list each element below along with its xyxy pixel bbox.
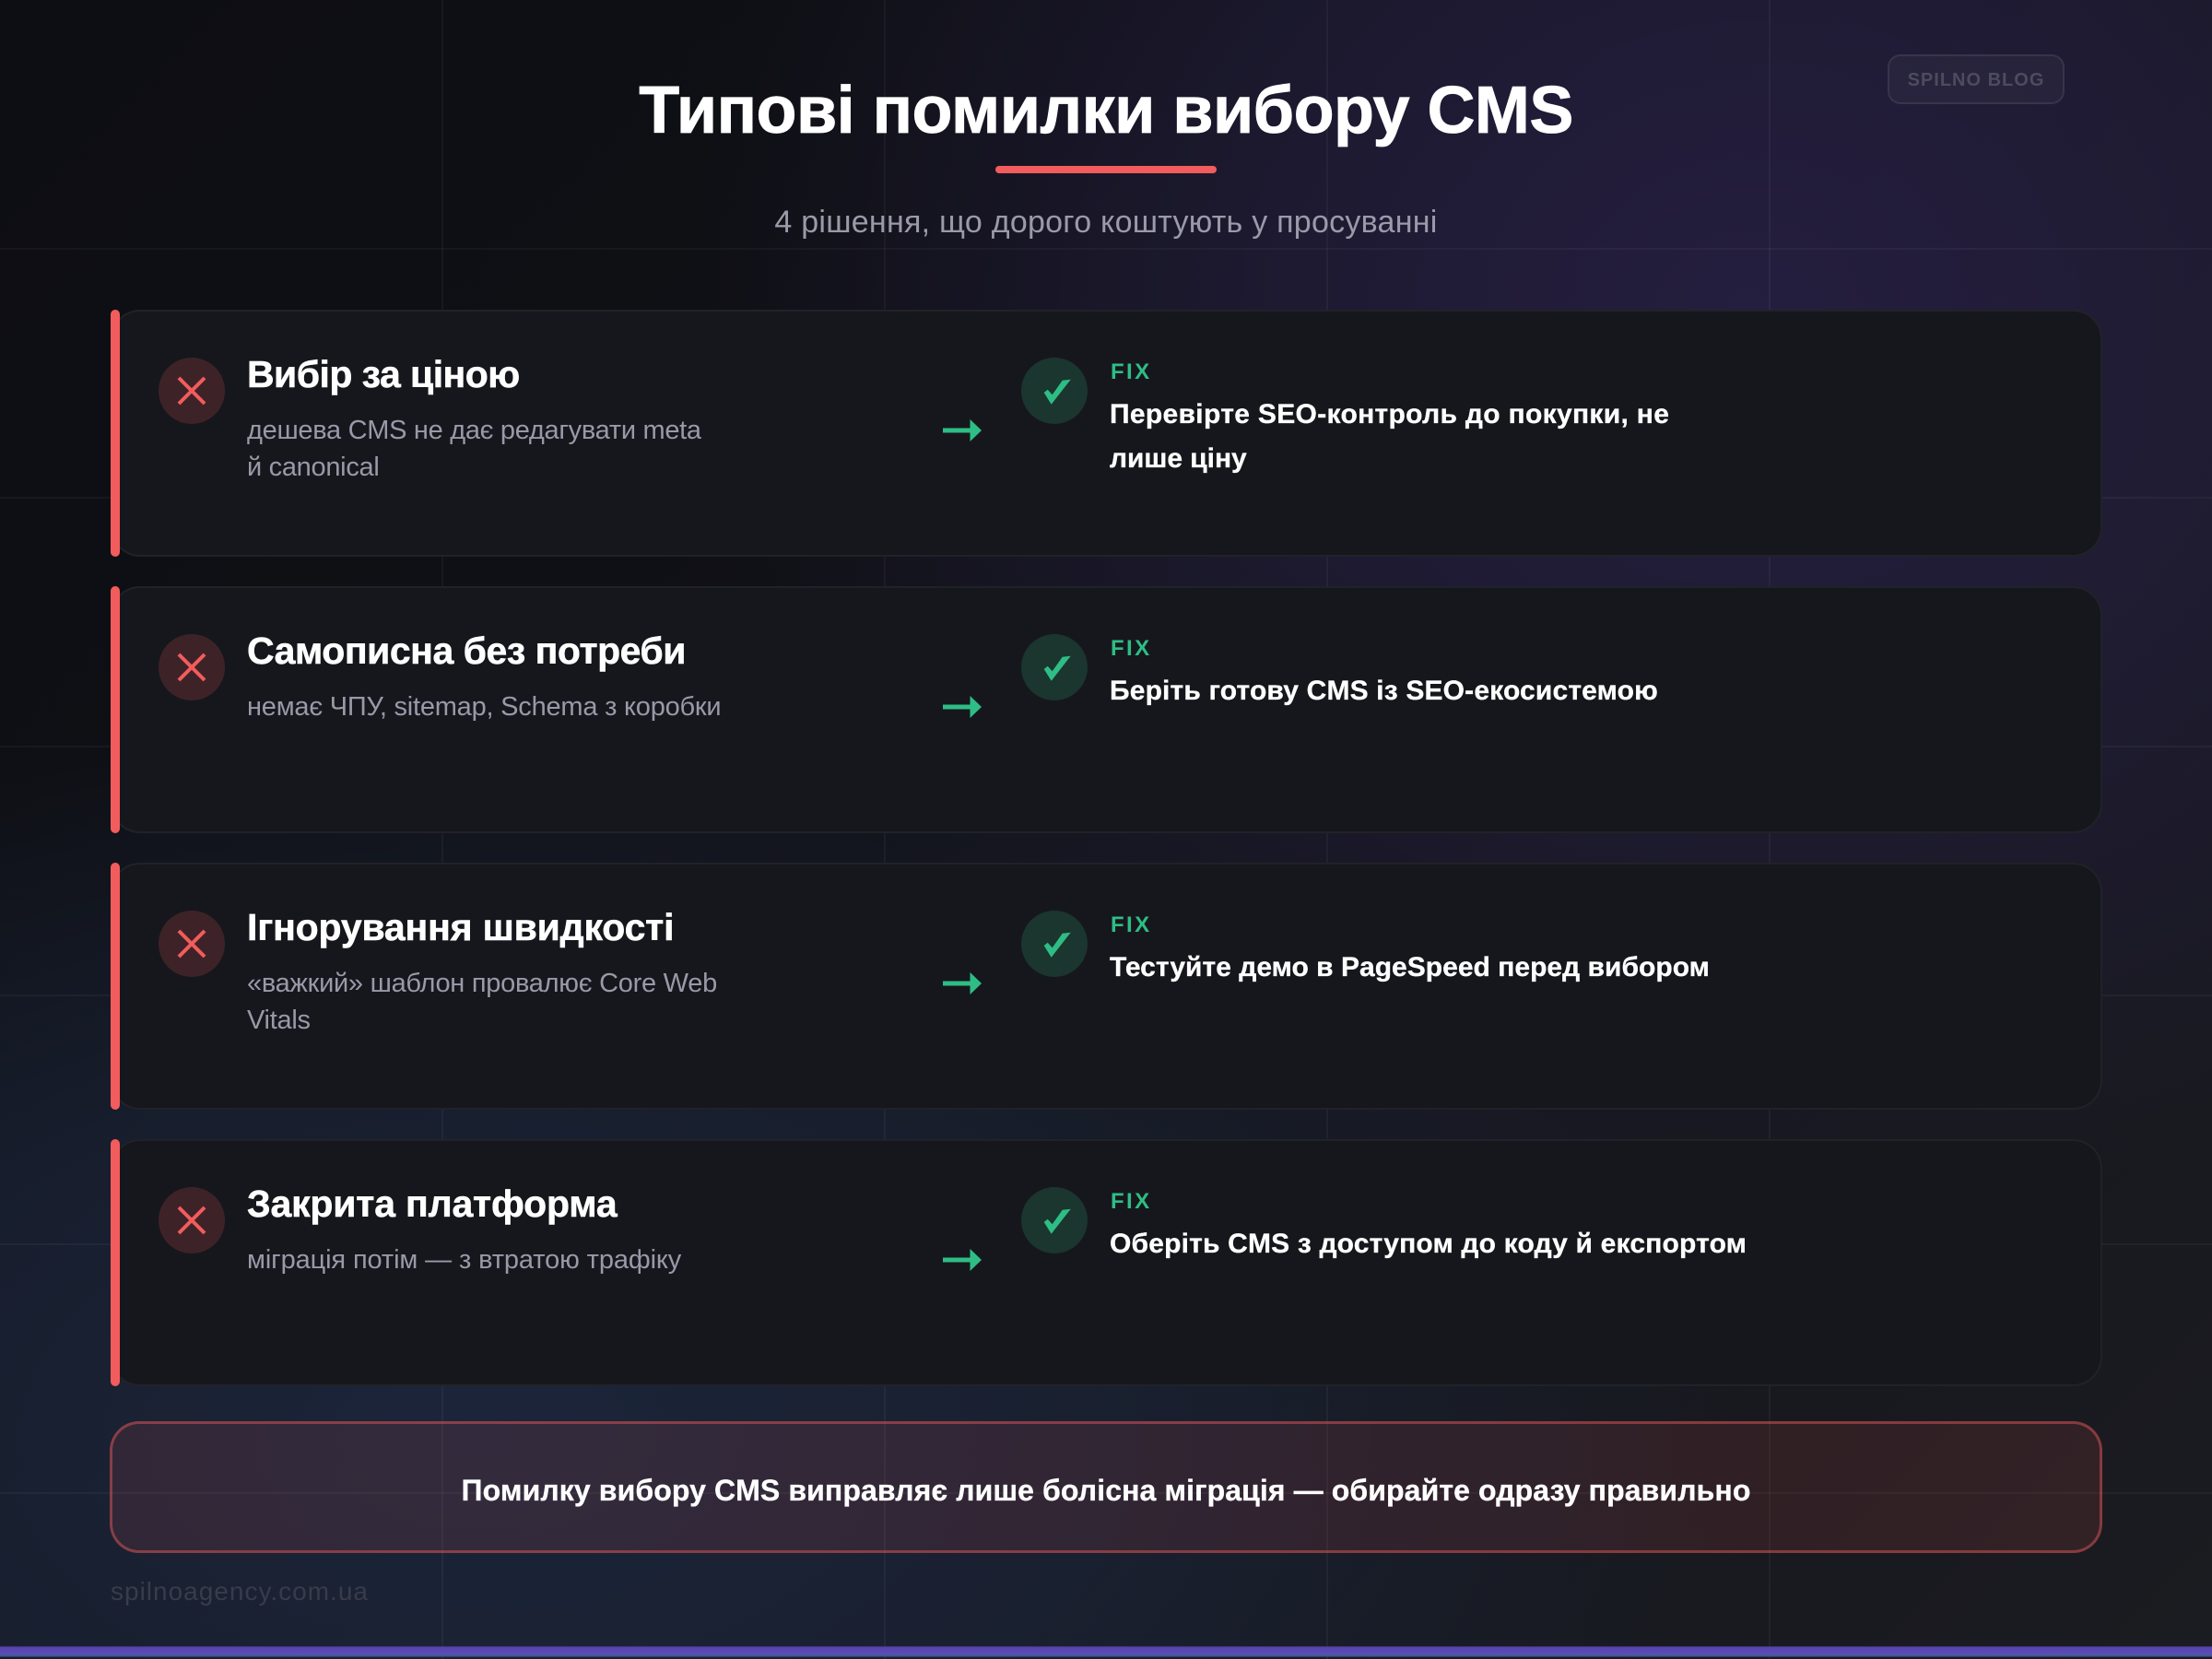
arrow [943, 972, 982, 994]
fix text [1110, 399, 1669, 474]
arrow [943, 696, 982, 718]
problem heading: Закрита платформа [247, 1182, 617, 1225]
fix label: FIX [1111, 636, 1152, 661]
problem heading: Самописна без потреби [247, 629, 686, 672]
fix text: лише ціну [1110, 443, 1247, 474]
fix text: Тестуйте демо в PageSpeed перед вибором [1110, 952, 1710, 982]
problem description: Vitals [247, 1006, 311, 1035]
title underline [995, 166, 1217, 173]
callout [110, 1421, 2102, 1553]
fix text: Беріть готову CMS із SEO-екосистемою [1110, 676, 1658, 706]
fix label: FIX [1111, 912, 1152, 937]
problem description [247, 969, 717, 1035]
callout text: Помилку вибору CMS виправляє лише болісна міграція — обирайте одразу правильно [461, 1474, 1750, 1507]
card 1: price [111, 310, 2102, 557]
problem description: «важкий» шаблон провалює Core Web [247, 969, 717, 998]
fix text: Перевірте SEO-контроль до покупки, не [1110, 399, 1669, 429]
icon: check [1021, 911, 1088, 977]
arrow [943, 419, 982, 441]
problem description: дешева CMS не дає редагувати meta [247, 416, 701, 445]
problem description: немає ЧПУ, sitemap, Schema з коробки [247, 692, 721, 722]
footer url: spilnoagency.com.ua [111, 1577, 369, 1606]
card background [111, 863, 2102, 1110]
card background [111, 1139, 2102, 1386]
card background [111, 586, 2102, 833]
icon: cross [159, 358, 225, 424]
arrow [943, 1249, 982, 1271]
accent bar [111, 310, 120, 557]
icon: cross [159, 1187, 225, 1253]
bottom accent bar [0, 1646, 2212, 1657]
problem description: міграція потім — з втратою трафіку [247, 1245, 681, 1275]
card 3: speed [111, 863, 2102, 1110]
icon: cross [159, 911, 225, 977]
problem description: й canonical [247, 453, 379, 482]
problem heading: Ігнорування швидкості [247, 906, 674, 948]
icon: check [1021, 358, 1088, 424]
subtitle: 4 рішення, що дорого коштують у просуванні [774, 205, 1438, 240]
accent bar [111, 586, 120, 833]
card 2: custom build [111, 586, 2102, 833]
icon: cross [159, 634, 225, 700]
accent bar [111, 1139, 120, 1386]
accent bar [111, 863, 120, 1110]
badge: Spilno Blog: SPILNO BLOG [1908, 70, 2044, 90]
fix label: FIX [1111, 359, 1152, 384]
card background [111, 310, 2102, 557]
fix label: FIX [1111, 1189, 1152, 1214]
badge: Spilno Blog [1888, 54, 2065, 104]
icon: check [1021, 1187, 1088, 1253]
problem description [247, 416, 701, 482]
problem heading: Вибір за ціною [247, 353, 520, 395]
fix text: Оберіть CMS з доступом до коду й експортом [1110, 1229, 1747, 1259]
title: Типові помилки вибору CMS [639, 74, 1573, 147]
icon: check [1021, 634, 1088, 700]
card 4: closed platform [111, 1139, 2102, 1386]
